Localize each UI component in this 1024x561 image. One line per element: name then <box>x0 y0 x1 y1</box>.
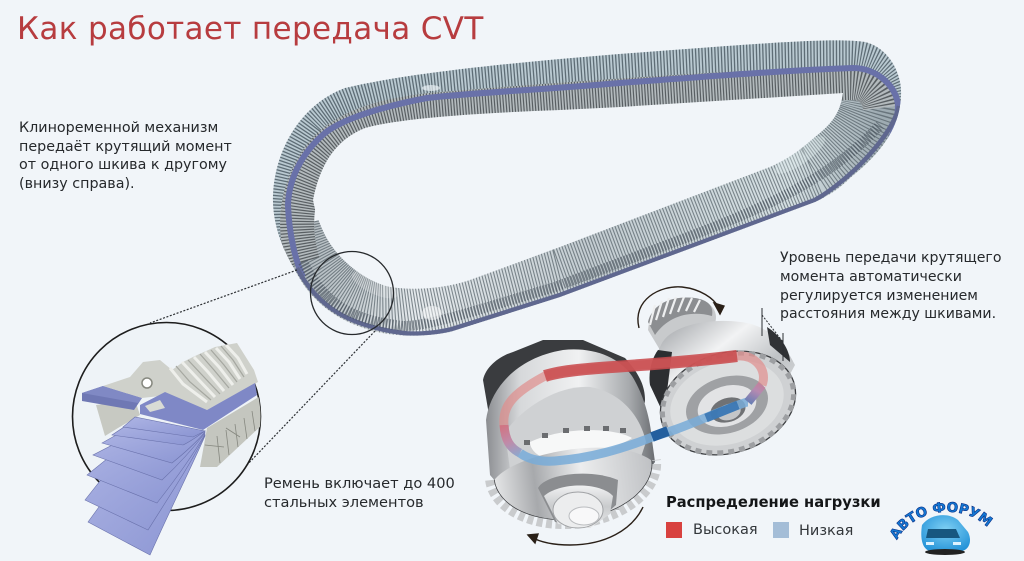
text: belt mechanism description: от одного шкива к другому <box>19 157 227 173</box>
bolt <box>538 474 618 528</box>
inner lit surface <box>505 387 646 470</box>
CVT belt <box>273 50 905 334</box>
text: belt mechanism description: передаёт крутящий момент <box>19 138 232 154</box>
rotation arrow: top <box>638 287 724 328</box>
square slots <box>524 426 626 445</box>
legend swatch: low <box>773 522 789 538</box>
pulley gap bracket <box>762 308 783 361</box>
small pulley <box>647 297 809 471</box>
legend swatch: high <box>666 522 682 538</box>
V-belt: high load (red) and low load (blue) <box>504 356 763 461</box>
cone <box>655 321 795 430</box>
forum logo: АВТО ФОРУМ <box>890 502 994 540</box>
toothed front disc <box>487 439 663 534</box>
title: Как работает передача CVT <box>17 11 484 47</box>
large pulley <box>483 340 663 534</box>
splined hub <box>648 297 716 350</box>
text: belt mechanism description <box>19 120 232 192</box>
body <box>486 349 655 510</box>
text: belt mechanism description: (внизу справа). <box>19 176 135 192</box>
text: belt mechanism description: Клиноременной механизм <box>19 120 218 136</box>
steel band sheets <box>85 417 205 555</box>
inset: belt element detail <box>72 322 262 555</box>
dotted leader lines <box>150 270 375 467</box>
text: torque regulation: Уровень передачи крутящего <box>780 250 1001 266</box>
rotation arrow: bottom <box>528 507 643 545</box>
text: torque regulation: момента автоматически <box>780 269 962 285</box>
text: steel elements: Ремень включает до 400 <box>264 475 455 492</box>
legend heading: Распределение нагрузки <box>666 494 881 511</box>
silver element with ridges <box>103 343 258 410</box>
magnifier circle on belt <box>310 252 394 334</box>
text: torque regulation: регулируется изменением <box>780 288 978 304</box>
text: steel elements <box>264 475 455 511</box>
legend label: high: Высокая <box>693 522 758 538</box>
text: torque regulation <box>780 250 1001 322</box>
text: torque regulation: расстояния между шкивами. <box>780 306 996 322</box>
text: steel elements: стальных элементов <box>264 494 424 511</box>
back rim <box>483 340 645 450</box>
disc <box>647 335 809 471</box>
legend label: low: Низкая <box>799 523 853 539</box>
